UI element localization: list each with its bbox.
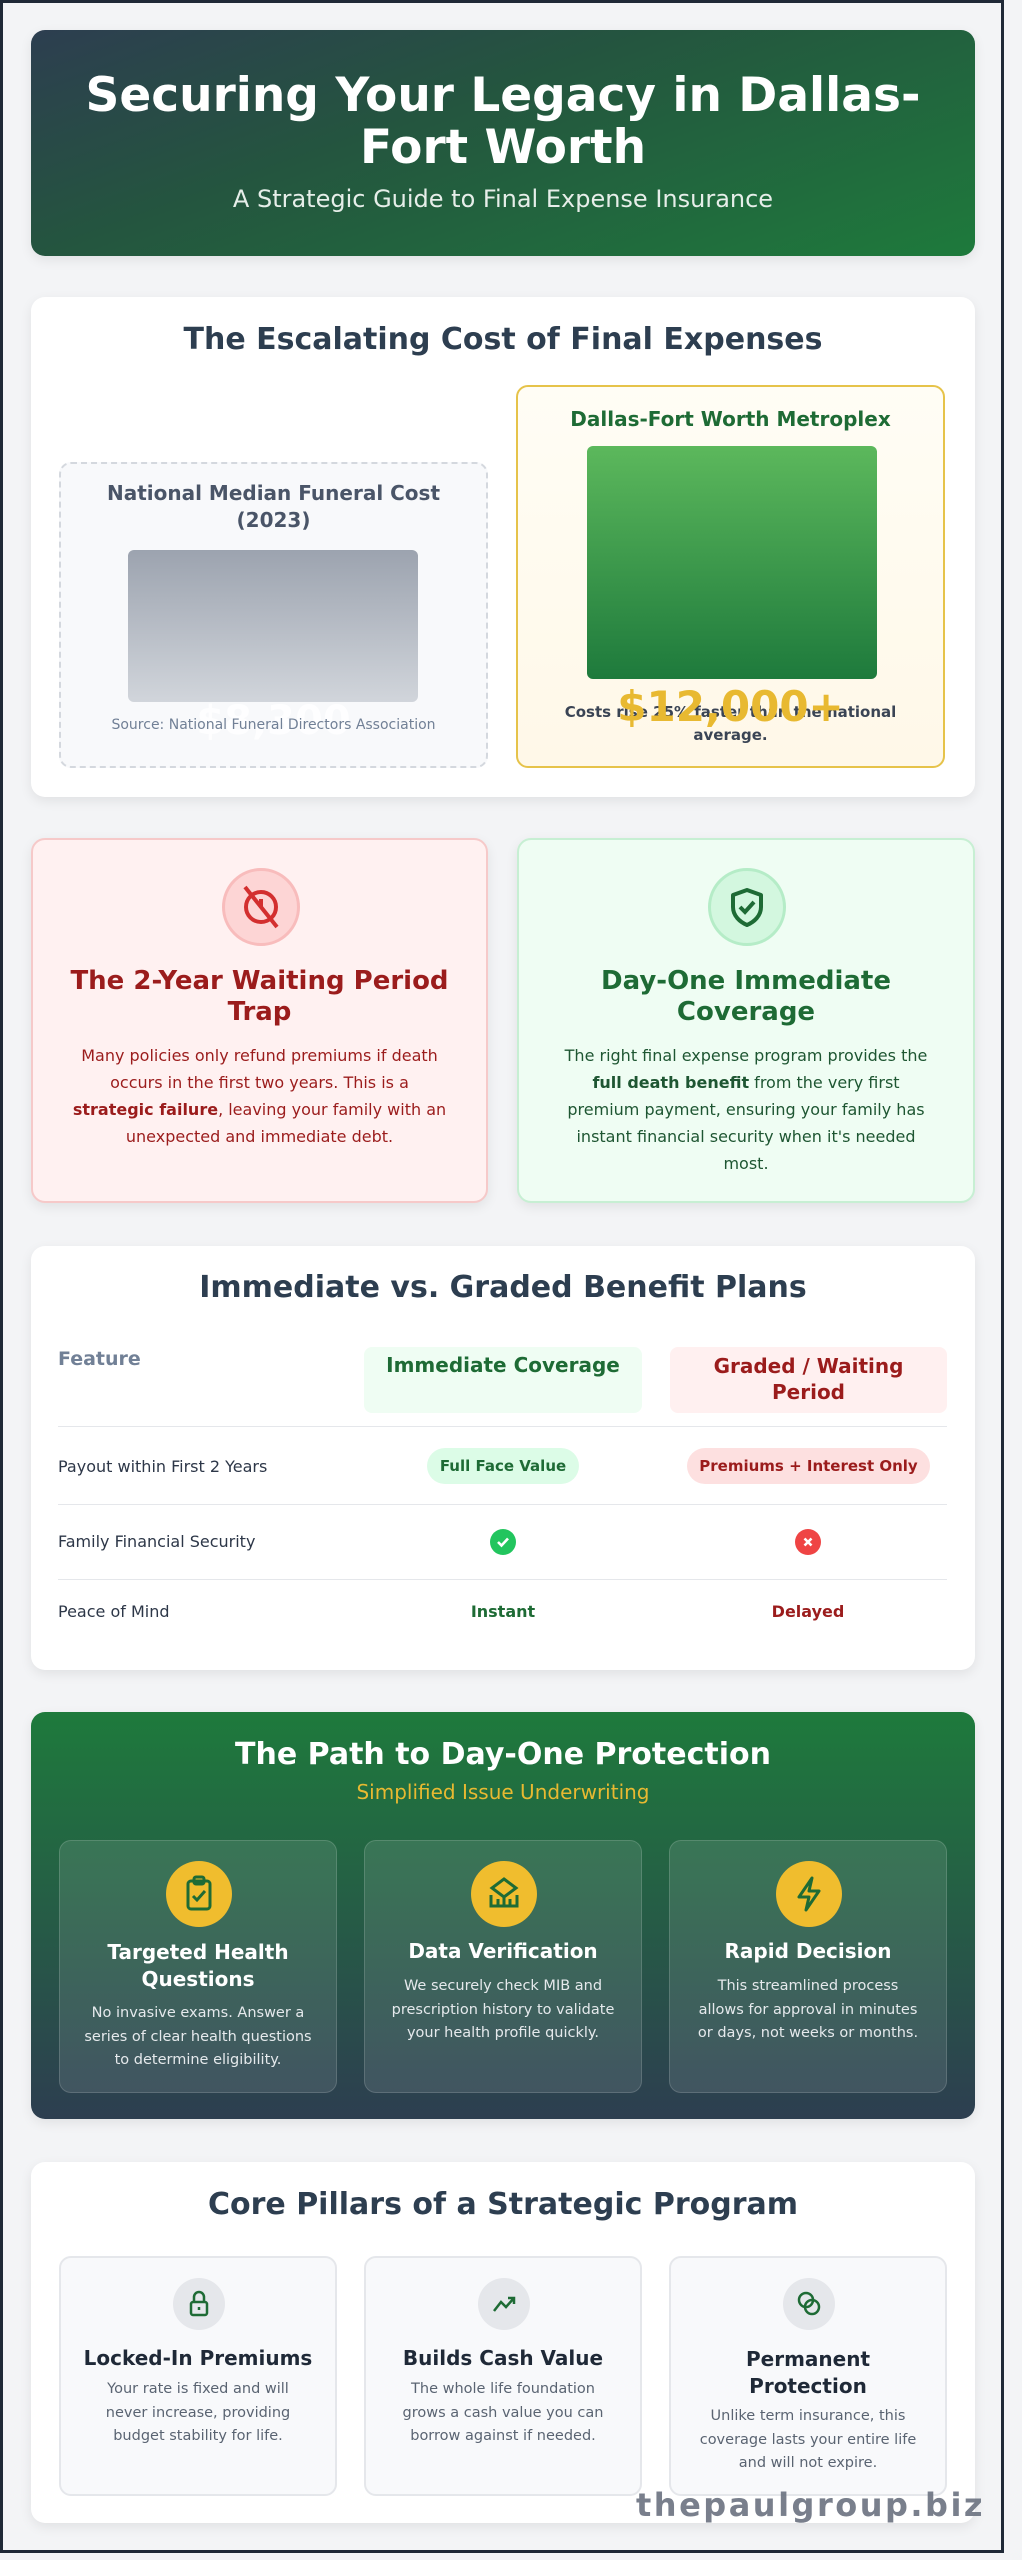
title: Securing Your Legacy in Dallas- — [86, 68, 920, 123]
header: immediate: Immediate Coverage — [386, 1353, 620, 1377]
row: peace of mind: Instant — [471, 1602, 535, 1621]
trap body — [73, 1046, 446, 1146]
pillar: locked-in premiums — [59, 2256, 337, 2496]
step: data verification: Data Verification — [408, 1939, 598, 1963]
national bar — [128, 550, 418, 702]
coverage title: Day-One Immediate — [601, 966, 891, 996]
DFW value: $12,000+ — [617, 682, 844, 731]
subheading: Simplified Issue Underwriting — [356, 1780, 650, 1804]
header: graded — [670, 1347, 947, 1413]
icon: shield — [708, 868, 786, 946]
header banner — [31, 30, 975, 256]
pillar: locked-in premiums: never increase, providing — [106, 2404, 290, 2420]
pill: full face value: Full Face Value — [440, 1457, 566, 1475]
row: payout: Payout within First 2 Years — [58, 1457, 267, 1476]
national label: National Median Funeral Cost — [107, 481, 440, 505]
row: peace of mind: Delayed — [772, 1602, 844, 1621]
DFW label: Dallas-Fort Worth Metroplex — [570, 407, 891, 431]
pillar: permanent protection: Permanent — [746, 2347, 870, 2371]
trap body: occurs in the first two years. This is a — [110, 1073, 409, 1092]
national label: (2023) — [237, 508, 310, 532]
row: family security — [58, 1529, 821, 1555]
pill: premiums only — [687, 1448, 930, 1484]
step: health questions: Targeted Health — [107, 1940, 289, 1964]
header: feature: Feature — [58, 1348, 141, 1370]
icon: cross — [795, 1529, 821, 1555]
source: Source: National Funeral Directors Association — [111, 717, 436, 733]
national value: $8,300 — [196, 698, 351, 744]
pillar: permanent protection — [669, 2256, 947, 2496]
step: health questions: series of clear health questions — [84, 2028, 312, 2044]
heading: The Path to Day-One Protection — [235, 1737, 771, 1772]
step: rapid decision: Rapid Decision — [725, 1939, 891, 1963]
watermark: thepaulgroup.biz — [636, 2486, 985, 2524]
panel: core pillars — [31, 2162, 975, 2523]
step: rapid decision — [669, 1840, 947, 2093]
pillar: locked-in premiums: Locked-In Premiums — [84, 2346, 312, 2370]
trap title: The 2-Year Waiting Period — [70, 966, 449, 996]
trap body: strategic failure, leaving your family with an — [73, 1100, 446, 1119]
heading: Core Pillars of a Strategic Program — [208, 2187, 798, 2222]
pillar: cash value: grows a cash value you can — [403, 2404, 603, 2420]
panel: waiting period trap — [31, 838, 488, 1203]
pillar: permanent protection: Unlike term insurance, this — [711, 2408, 905, 2424]
coverage title — [601, 966, 891, 1027]
trap body: unexpected and immediate debt. — [126, 1127, 393, 1146]
icon: data — [471, 1861, 537, 1927]
step: health questions: to determine eligibility. — [115, 2052, 281, 2068]
pill: full face value — [427, 1448, 579, 1484]
icon: rings — [783, 2278, 835, 2330]
trap title — [70, 966, 449, 1027]
pill: premiums only: Premiums + Interest Only — [699, 1457, 918, 1475]
coverage body — [564, 1046, 927, 1173]
step: health questions: No invasive exams. Answer a — [92, 2005, 304, 2021]
step: health questions: Questions — [141, 1967, 254, 1991]
panel: day-one coverage — [517, 838, 975, 1203]
DFW note: Costs rise 25% faster than the national average. — [565, 703, 896, 744]
coverage body: The right final expense program provides the — [565, 1046, 927, 1065]
coverage body: instant financial security when it's needed — [576, 1127, 916, 1146]
heading: The Escalating Cost of Final Expenses — [184, 322, 822, 357]
pillar: locked-in premiums: Your rate is fixed and will — [107, 2381, 289, 2397]
title: Fort Worth — [360, 120, 646, 175]
title — [86, 68, 920, 175]
step: data verification: your health profile quickly. — [407, 2025, 599, 2041]
pillar: cash value: borrow against if needed. — [410, 2428, 596, 2444]
row: payout — [58, 1448, 930, 1484]
row: peace of mind: Peace of Mind — [58, 1602, 170, 1621]
coverage body: full death benefit from the very first — [592, 1073, 900, 1092]
DFW box — [516, 385, 945, 768]
heading: Immediate vs. Graded Benefit Plans — [199, 1270, 807, 1305]
panel: path to protection — [31, 1712, 975, 2119]
header: graded: Graded / Waiting — [714, 1354, 903, 1378]
row: family security: Family Financial Security — [58, 1532, 255, 1551]
DFW bar — [587, 446, 877, 679]
panel: escalating cost — [31, 297, 975, 797]
step: data verification — [364, 1840, 642, 2093]
step: rapid decision: This streamlined process — [718, 1978, 898, 1994]
row: peace of mind — [58, 1602, 844, 1621]
coverage body: most. — [723, 1154, 769, 1173]
icon: lock — [173, 2278, 225, 2330]
panel: comparison table — [31, 1246, 975, 1670]
header: graded: Period — [772, 1380, 845, 1404]
pillar: permanent protection: coverage lasts your entire life — [700, 2432, 916, 2448]
coverage body: premium payment, ensuring your family has — [567, 1100, 925, 1119]
step: health questions — [59, 1840, 337, 2093]
pillar: permanent protection: Protection — [749, 2374, 867, 2398]
subtitle: A Strategic Guide to Final Expense Insurance — [233, 185, 773, 213]
trap body: Many policies only refund premiums if death — [81, 1046, 438, 1065]
national label — [107, 481, 440, 532]
pillar: permanent protection: and will not expire. — [739, 2455, 877, 2471]
national cost box — [59, 462, 488, 768]
step: data verification: prescription history to validate — [392, 2002, 614, 2018]
icon: no clock — [222, 868, 300, 946]
icon: trend — [478, 2278, 530, 2330]
icon: check — [490, 1529, 516, 1555]
pillar: cash value: Builds Cash Value — [403, 2346, 603, 2370]
icon: clipboard — [166, 1861, 232, 1927]
coverage title: Coverage — [677, 997, 815, 1027]
pillar: locked-in premiums: budget stability for life. — [113, 2428, 283, 2444]
icon: lightning — [776, 1861, 842, 1927]
step: rapid decision: allows for approval in minutes — [699, 2002, 917, 2018]
pillar: cash value — [364, 2256, 642, 2496]
trap title: Trap — [228, 997, 291, 1027]
step: data verification: We securely check MIB and — [404, 1978, 602, 1994]
pillar: cash value: The whole life foundation — [411, 2381, 595, 2397]
header: immediate — [364, 1347, 642, 1413]
step: rapid decision: or days, not weeks or months. — [698, 2025, 918, 2041]
